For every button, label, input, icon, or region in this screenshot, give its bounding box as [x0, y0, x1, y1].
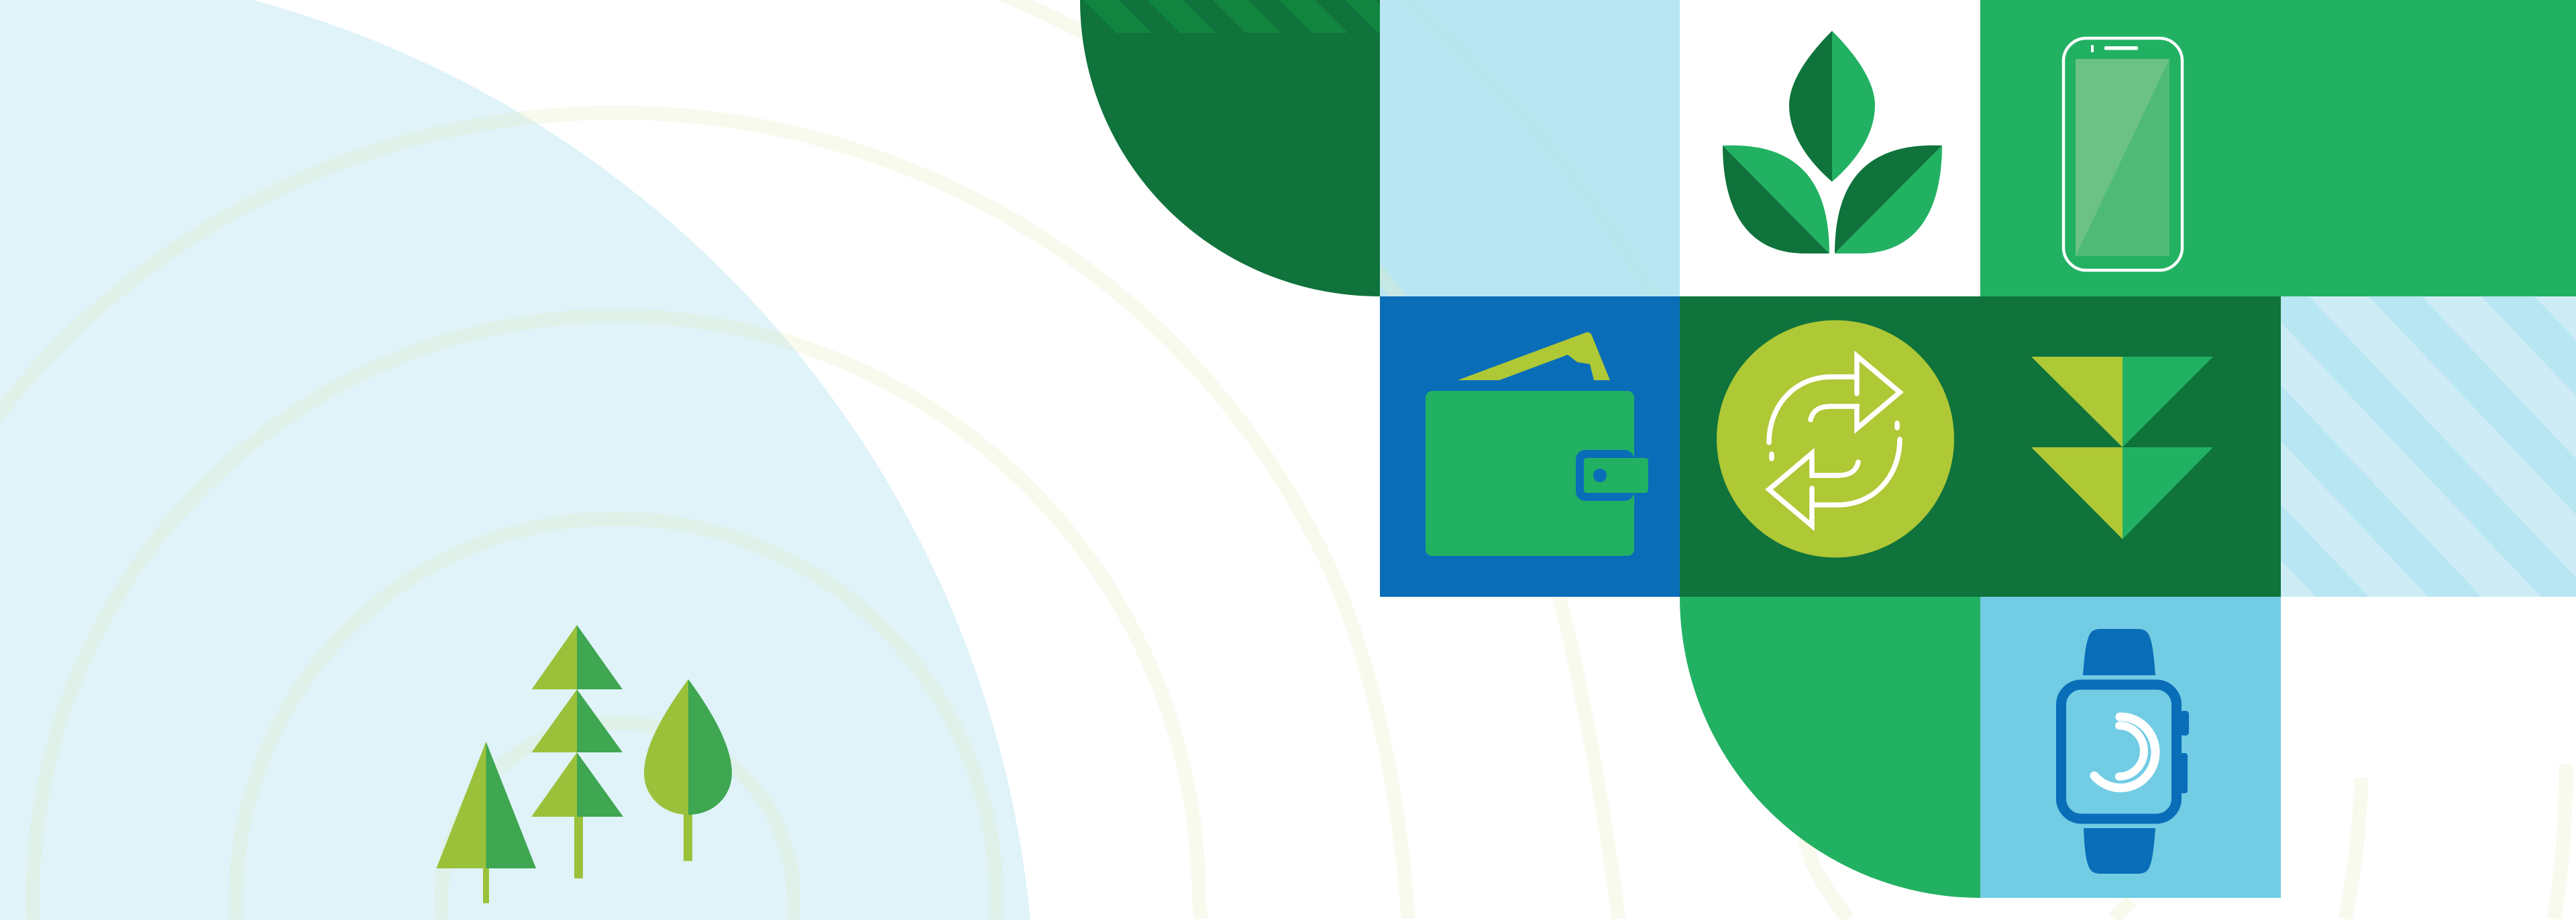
- panel: green cell: [1980, 0, 2576, 296]
- panel: sky blue watch cell: [1980, 597, 2281, 898]
- icon: wallet: [1426, 332, 1648, 556]
- diagonal stripes: [2281, 296, 2576, 597]
- panel: dark green band: [1680, 296, 2281, 597]
- panel: light blue cell: [1380, 0, 1680, 296]
- icon: triangular tree: [436, 742, 536, 903]
- panel: pale blue background circle: [0, 0, 1030, 920]
- panel: blue wallet cell: [1380, 296, 1680, 597]
- icon: smartwatch: [2061, 629, 2189, 874]
- panel: dark green quarter circle: [1080, 0, 1380, 296]
- sync arrows: [1769, 356, 1900, 526]
- panel: green quarter circle: [1680, 597, 1980, 898]
- icon: stacked triangles: [2031, 357, 2213, 539]
- icon: lime circle with sync arrows: [1717, 321, 1954, 558]
- icon: three leaves: [1723, 31, 1942, 253]
- ring segment over light blue cell: [1399, 0, 1657, 302]
- hatch stripes on dark green: [1083, 0, 1380, 33]
- panel: striped light blue cell: [2281, 296, 2576, 597]
- watch activity arcs: [2094, 717, 2155, 788]
- icon: smartphone: [2063, 38, 2182, 270]
- icon: three-tier pine tree: [531, 625, 623, 878]
- icon: round leaf tree: [644, 679, 732, 861]
